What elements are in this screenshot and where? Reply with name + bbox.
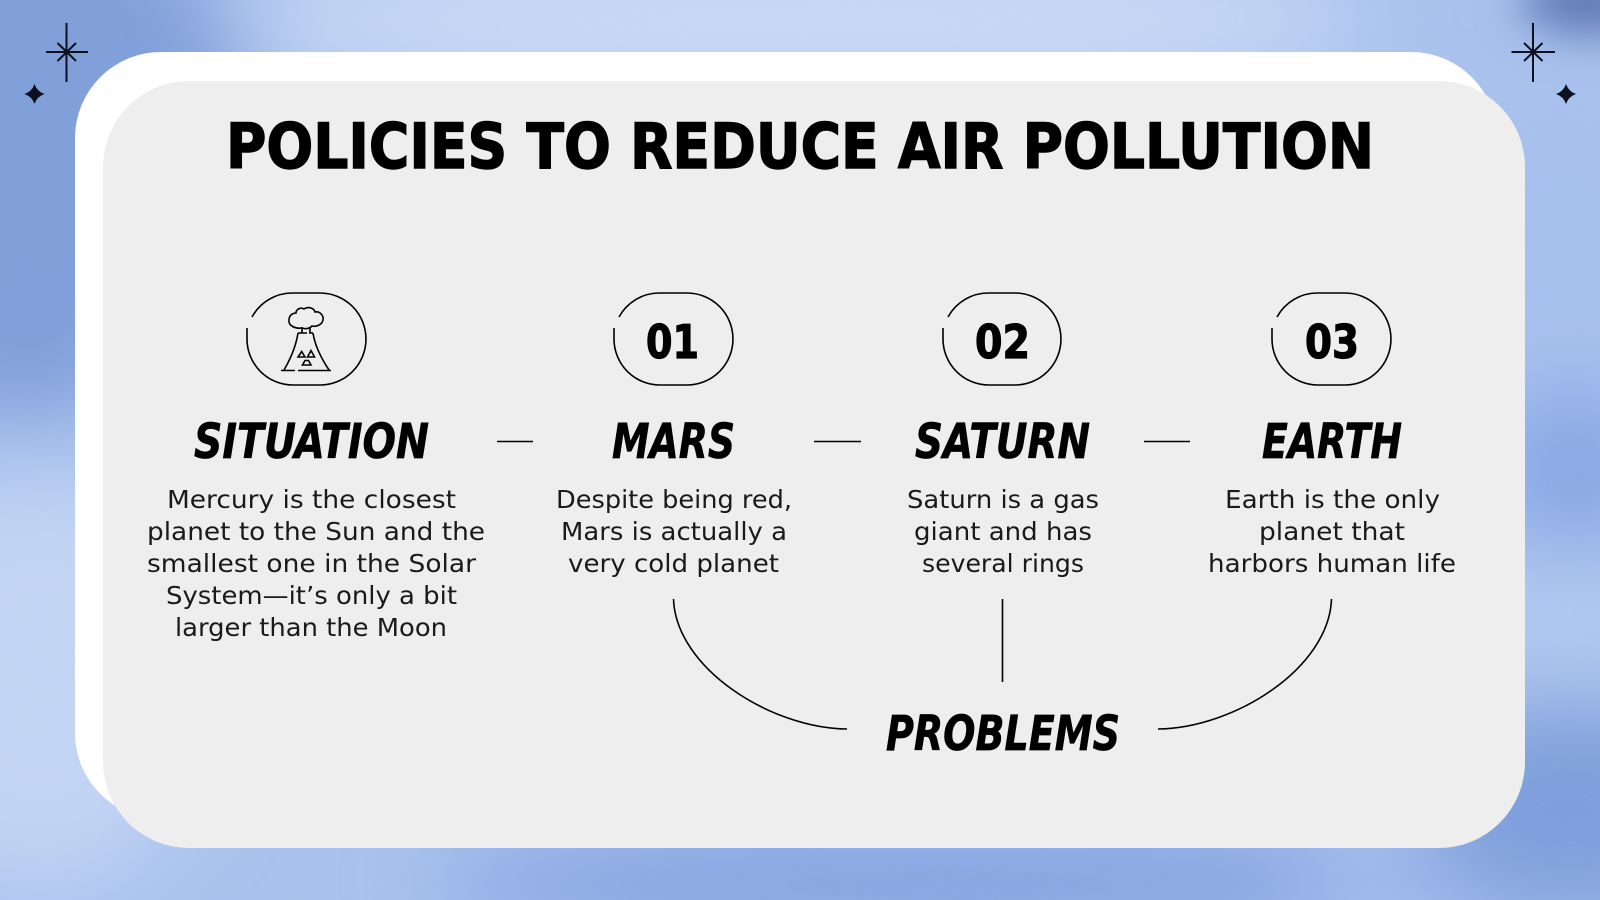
icon: small sparkle left	[24, 84, 44, 104]
connector: situation to mars	[497, 440, 533, 442]
heading: situation: SITUATION	[194, 414, 429, 470]
heading: mars: MARS	[612, 414, 735, 470]
text: situation description	[147, 485, 485, 642]
heading: saturn: SATURN	[915, 414, 1090, 470]
panel: grey content card	[103, 81, 1525, 848]
text: earth description	[1208, 485, 1456, 578]
text: earth description: harbors human life	[1208, 549, 1456, 578]
text: situation description: smallest one in the Solar	[147, 549, 477, 578]
text: earth description: Earth is the only	[1225, 485, 1440, 514]
badge: 01	[614, 293, 733, 385]
title: POLICIES TO REDUCE AIR POLLUTION	[226, 110, 1374, 183]
text: mars description: Mars is actually a	[561, 517, 787, 546]
connector: mars to saturn	[814, 440, 861, 442]
text: situation description: System—it’s only a bit	[166, 581, 457, 610]
text: situation description: larger than the Moon	[175, 613, 447, 642]
text: saturn description: Saturn is a gas	[907, 485, 1099, 514]
text: mars description	[556, 485, 792, 578]
icon: large sparkle right	[1512, 23, 1555, 82]
icon: large sparkle left	[46, 23, 88, 82]
step: mars	[556, 293, 792, 578]
text: mars description: very cold planet	[568, 549, 779, 578]
text: saturn description	[907, 485, 1099, 578]
step: earth	[1208, 293, 1456, 578]
bracket: links steps to problems	[674, 599, 1332, 729]
badge: 02	[943, 293, 1061, 385]
text: situation description: planet to the Sun and the	[147, 517, 485, 546]
step: saturn	[907, 293, 1099, 578]
badge: 01: 01	[646, 315, 699, 369]
heading: problems: PROBLEMS	[886, 706, 1120, 762]
text: situation description: Mercury is the closest	[167, 485, 456, 514]
icon: volcano badge	[247, 293, 366, 385]
text: earth description: planet that	[1259, 517, 1405, 546]
step: situation	[147, 293, 485, 642]
connector: saturn to earth	[1144, 440, 1190, 442]
panel: white backing card	[75, 52, 1497, 819]
badge: 02: 02	[975, 315, 1030, 369]
badge: 03: 03	[1305, 315, 1359, 369]
icon: small sparkle right	[1556, 84, 1576, 104]
text: saturn description: giant and has	[914, 517, 1092, 546]
heading: earth: EARTH	[1262, 414, 1402, 470]
text: mars description: Despite being red,	[556, 485, 792, 514]
badge: 03	[1272, 293, 1391, 385]
text: saturn description: several rings	[922, 549, 1084, 578]
